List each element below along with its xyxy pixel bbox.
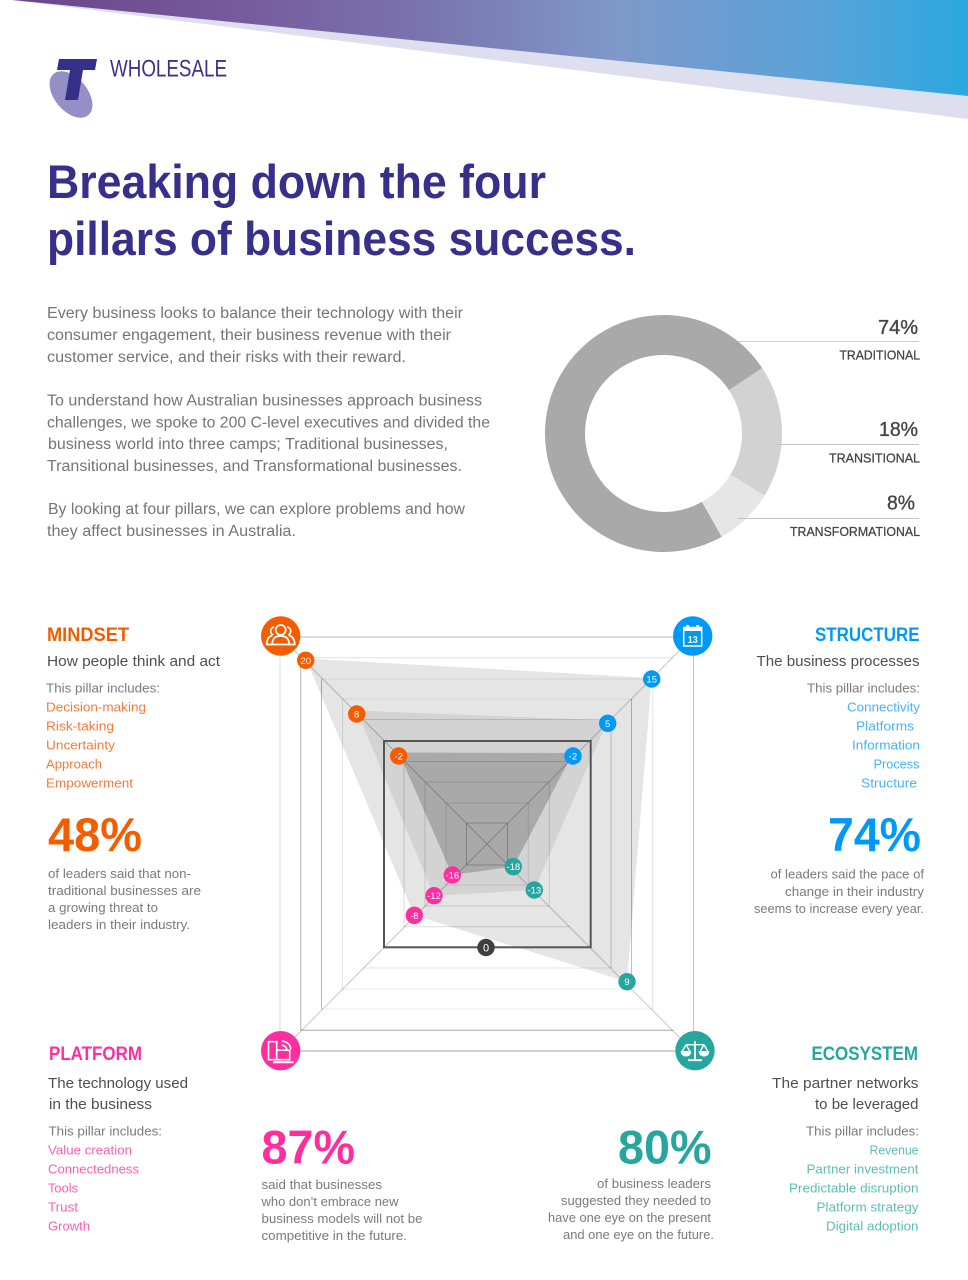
panel: ecosystem: 80% <box>618 1120 712 1174</box>
logo: Telstra Wholesale: WHOLESALE <box>110 56 227 82</box>
marker: platform -16: -16 <box>445 870 459 882</box>
panel: platform: Growth <box>48 1218 90 1234</box>
marker: zero: 0 <box>483 942 489 954</box>
marker: ecosystem -13 <box>526 881 543 899</box>
panel: structure <box>754 625 925 916</box>
panel: structure: The business processes <box>756 654 920 670</box>
intro text: By looking at four pillars, we can explore problems and how <box>48 501 466 518</box>
marker: platform -12: -12 <box>427 891 441 902</box>
donut legend: 18% <box>879 418 918 441</box>
panel: ecosystem: ECOSYSTEM <box>812 1044 918 1065</box>
icon: ecosystem scales <box>675 1031 715 1070</box>
panel: ecosystem: Revenue <box>870 1142 918 1158</box>
panel: platform: PLATFORM <box>49 1044 142 1065</box>
marker: mindset 20 <box>297 652 314 669</box>
panel: structure: Information <box>852 738 920 752</box>
panel: ecosystem: suggested they needed to <box>561 1193 711 1208</box>
marker: structure 5 <box>599 715 616 732</box>
panel: structure: This pillar includes: <box>807 680 920 696</box>
marker: platform -12 <box>425 887 443 904</box>
panel: structure: STRUCTURE <box>815 625 920 646</box>
panel: ecosystem: of business leaders <box>597 1176 712 1191</box>
panel: structure: Connectivity <box>847 700 921 714</box>
panel: structure: Platforms <box>856 718 915 734</box>
panel: mindset: of leaders said that non- <box>48 866 191 881</box>
panel: ecosystem: This pillar includes: <box>806 1124 919 1138</box>
intro text: they affect businesses in Australia. <box>47 523 296 540</box>
marker: zero <box>477 939 495 956</box>
title <box>47 155 636 265</box>
donut legend: TRADITIONAL <box>840 348 920 362</box>
panel: structure: 74% <box>828 808 921 861</box>
icon: platform devices <box>261 1031 300 1070</box>
panel: ecosystem: Digital adoption <box>826 1218 918 1234</box>
marker: platform -16 <box>444 866 461 884</box>
panel: ecosystem: have one eye on the present <box>548 1210 711 1225</box>
intro text: To understand how Australian businesses approach business <box>47 392 482 410</box>
marker: mindset -2 <box>390 747 407 765</box>
panel: platform: business models will not be <box>262 1211 422 1226</box>
panel: structure: Structure <box>861 776 917 790</box>
marker: structure 5: 5 <box>605 719 610 730</box>
panel: mindset: Decision-making <box>46 700 146 714</box>
intro text <box>47 305 490 540</box>
panel: platform: Value creation <box>48 1142 132 1158</box>
panel: mindset: leaders in their industry. <box>48 917 190 932</box>
marker: structure 15 <box>643 670 660 688</box>
donut legend: TRANSITIONAL <box>829 452 920 466</box>
intro text: consumer engagement, their business revenue with their <box>47 327 451 344</box>
panel: platform: Connectedness <box>48 1162 139 1176</box>
panel: platform: This pillar includes: <box>48 1124 162 1138</box>
panel: platform: The technology used <box>48 1076 188 1092</box>
panel: mindset: This pillar includes: <box>46 680 160 696</box>
panel: ecosystem <box>548 1044 919 1242</box>
marker: platform -8: -8 <box>410 911 419 922</box>
donut legend: 74% <box>878 316 918 339</box>
marker: structure -2: -2 <box>569 752 577 762</box>
marker: ecosystem -13: -13 <box>527 886 541 896</box>
marker: mindset 8 <box>348 705 365 723</box>
marker: structure 15: 15 <box>646 674 657 686</box>
panel: ecosystem: The partner networks <box>772 1076 918 1092</box>
intro text: challenges, we spoke to 200 C-level executives and divided the <box>47 414 490 432</box>
intro text: Transitional businesses, and Transformational businesses. <box>47 458 462 475</box>
panel: platform: in the business <box>49 1097 152 1113</box>
panel: mindset: 48% <box>48 808 142 861</box>
intro text: Every business looks to balance their technology with their <box>47 305 463 322</box>
panel: ecosystem: Platform strategy <box>816 1200 919 1214</box>
title: Breaking down the four <box>47 155 546 208</box>
radar chart <box>280 637 694 1051</box>
marker: mindset 20: 20 <box>300 656 311 667</box>
marker: ecosystem 9 <box>618 973 636 990</box>
panel: structure: seems to increase every year. <box>754 901 924 916</box>
donut legend <box>738 316 920 539</box>
panel: ecosystem: Predictable disruption <box>789 1180 918 1196</box>
logo: Telstra Wholesale <box>41 56 227 126</box>
panel: platform: 87% <box>262 1120 355 1174</box>
panel: platform: Trust <box>48 1200 78 1214</box>
donut legend: TRANSFORMATIONAL <box>790 525 920 539</box>
title: pillars of business success. <box>47 212 636 265</box>
header banner <box>12 0 968 119</box>
panel: mindset: a growing threat to <box>48 900 158 915</box>
intro text: customer service, and their risks with their reward. <box>47 349 406 366</box>
marker: mindset -2: -2 <box>394 752 403 762</box>
panel: ecosystem: Partner investment <box>806 1162 919 1176</box>
donut chart <box>545 315 782 552</box>
marker: ecosystem -18: -18 <box>506 862 520 873</box>
marker: structure -2 <box>564 747 582 765</box>
panel: platform: who don’t embrace new <box>261 1194 399 1209</box>
panel: structure: Process <box>874 756 920 772</box>
panel: mindset <box>46 625 220 932</box>
donut legend: 8% <box>887 492 915 514</box>
panel: mindset: MINDSET <box>47 625 129 646</box>
panel: structure: change in their industry <box>785 884 925 899</box>
panel: mindset: Approach <box>46 756 102 772</box>
icon: structure calendar <box>673 616 712 656</box>
panel: ecosystem: and one eye on the future. <box>563 1227 714 1242</box>
panel: mindset: Uncertainty <box>46 738 116 752</box>
panel: platform: said that businesses <box>262 1177 383 1192</box>
intro text: business world into three camps; Traditional businesses, <box>48 436 448 453</box>
marker: ecosystem -18 <box>505 858 522 875</box>
panel: mindset: Empowerment <box>46 776 133 790</box>
panel: platform <box>48 1044 422 1243</box>
panel: ecosystem: to be leveraged <box>815 1097 918 1113</box>
marker: ecosystem 9: 9 <box>624 977 630 988</box>
panel: mindset: Risk-taking <box>46 718 114 734</box>
panel: structure: of leaders said the pace of <box>770 866 924 882</box>
icon: mindset people <box>261 616 300 656</box>
panel: mindset: traditional businesses are <box>48 883 201 898</box>
panel: platform: Tools <box>48 1180 78 1196</box>
marker: platform -8 <box>406 907 423 924</box>
panel: mindset: How people think and act <box>47 654 220 670</box>
panel: platform: competitive in the future. <box>262 1228 407 1243</box>
marker: mindset 8: 8 <box>354 710 359 720</box>
icon: structure calendar: 13 <box>688 634 698 646</box>
